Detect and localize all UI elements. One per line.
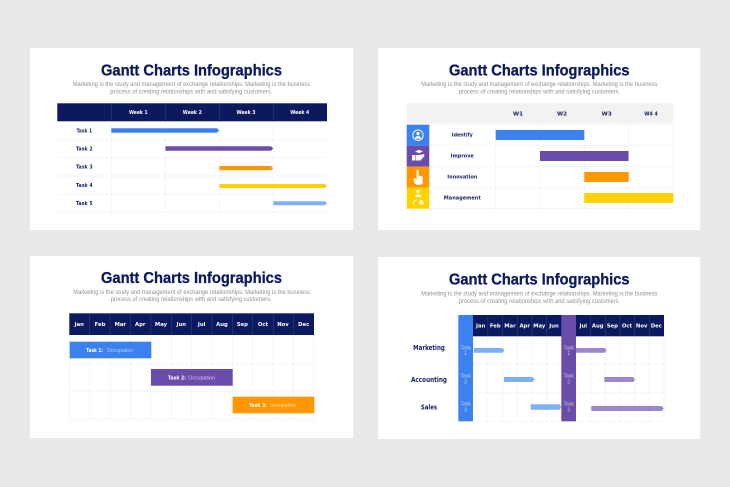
- phase labels: Management: [444, 196, 481, 202]
- bar: management: [584, 193, 673, 203]
- description text: process of creating relationships with and satisfying customers.: [111, 296, 272, 303]
- table header: Week 4: [290, 110, 309, 116]
- month header: Nov: [277, 322, 289, 328]
- gantt chart: months: [69, 313, 314, 419]
- department labels: [411, 344, 447, 412]
- month header: Jul: [197, 322, 206, 328]
- icon: hand with box: [407, 146, 429, 167]
- description text: [421, 290, 657, 305]
- month header: Oct: [622, 323, 633, 329]
- month header: Apr: [135, 322, 146, 328]
- task labels: [76, 128, 93, 207]
- task labels: Task 2: [76, 146, 93, 152]
- bar: accounting first half: [504, 377, 535, 382]
- department labels: Accounting: [411, 376, 447, 384]
- panel: monthly occupation gantt: [30, 256, 353, 438]
- column: first half tasks: Task: [461, 345, 471, 351]
- month header: Feb: [490, 323, 501, 329]
- month header: Jan: [475, 323, 486, 329]
- bar: task 2: [166, 146, 273, 151]
- table header: Week 1: [129, 110, 148, 116]
- description text: [421, 81, 657, 96]
- month header: Apr: [519, 323, 530, 329]
- title: Gantt Charts Infographics: [101, 270, 282, 287]
- column: first half tasks: 1: [464, 351, 467, 357]
- month header: Dec: [651, 323, 662, 329]
- gantt chart: phases: [407, 103, 673, 209]
- bar: task 2: Occupation: [188, 375, 215, 381]
- month header: Sep: [237, 322, 248, 328]
- month header: Oct: [258, 322, 269, 328]
- bar: task 1: Occupation: [107, 348, 133, 354]
- month header: Dec: [298, 322, 309, 328]
- bar: innovation: [584, 172, 629, 182]
- column: second half tasks: 1: [567, 351, 570, 357]
- title: Gantt Charts Infographics: [101, 62, 282, 79]
- month header: May: [533, 323, 546, 329]
- description text: Marketing is the study and management of exchange relationships. Marketing is the business: [73, 81, 310, 88]
- phase labels: Innovation: [447, 175, 477, 181]
- task labels: Task 4: [76, 183, 93, 189]
- bar: task 4: [220, 184, 327, 188]
- panel: weekly task gantt: [30, 48, 353, 230]
- month header: Jun: [548, 323, 559, 329]
- month header: Jan: [74, 322, 84, 328]
- table header: W1: [513, 111, 523, 117]
- bar: accounting second half: [604, 377, 635, 382]
- bar: task 5: [273, 201, 327, 205]
- month header: [69, 313, 314, 335]
- department labels: Marketing: [413, 344, 445, 352]
- column: second half tasks: Task: [564, 345, 574, 351]
- bar: task 1: [70, 342, 151, 358]
- bar: marketing first half: [474, 348, 504, 353]
- description text: process of creating relationships with and satisfying customers.: [459, 298, 620, 305]
- panel: department gantt: [378, 257, 700, 439]
- table header: [407, 103, 673, 123]
- table header: W2: [557, 111, 567, 117]
- description text: process of creating relationships with and satisfying customers.: [110, 89, 273, 96]
- month header: Jun: [176, 322, 186, 328]
- month header: Aug: [592, 323, 604, 329]
- month header: [473, 315, 664, 336]
- bar: sales first half: [531, 404, 561, 410]
- task labels: Task 3: [76, 165, 93, 171]
- month header: Jul: [579, 323, 587, 329]
- table header: [57, 103, 327, 121]
- bar: task 3: Task 3:: [249, 403, 267, 409]
- description text: process of creating relationships with and satisfying customers.: [459, 89, 620, 96]
- bar: task 1: [111, 128, 219, 133]
- phase labels: Improve: [451, 154, 474, 160]
- description text: [73, 81, 310, 96]
- description text: Marketing is the study and management of exchange relationships. Marketing is the business: [421, 290, 657, 297]
- gantt chart: departments: [411, 315, 664, 421]
- month header: Feb: [95, 322, 106, 328]
- bar: sales second half: [591, 406, 664, 411]
- bar: task 2: [151, 369, 233, 386]
- title: Gantt Charts Infographics: [449, 271, 630, 288]
- icon: person with nodes: [407, 188, 429, 209]
- description text: Marketing is the study and management of exchange relationships. Marketing is the business: [421, 81, 657, 88]
- bar: task 3: [220, 166, 273, 170]
- column: first half tasks: [458, 315, 473, 421]
- column: first half tasks: Task: [461, 374, 471, 380]
- description text: Marketing is the study and management of exchange relationships. Marketing is the business: [73, 289, 310, 296]
- bar: marketing second half: [576, 348, 607, 353]
- task labels: Task 1: [76, 128, 92, 134]
- bar: identify: [496, 130, 584, 140]
- table header: W3: [602, 111, 612, 117]
- description text: [73, 289, 310, 303]
- month header: Aug: [216, 322, 228, 328]
- column: second half tasks: [561, 315, 576, 421]
- department labels: Sales: [421, 404, 437, 412]
- icon: pointing hand: [407, 167, 429, 188]
- bar: improve: [540, 151, 628, 161]
- column: second half tasks: Task: [564, 402, 574, 408]
- column: second half tasks: Task: [564, 374, 574, 380]
- column: second half tasks: 2: [567, 380, 570, 386]
- table header: Week 3: [236, 110, 256, 116]
- phase labels: [444, 132, 481, 202]
- month header: Nov: [636, 323, 648, 329]
- month header: May: [155, 322, 168, 328]
- column: second half tasks: 3: [567, 408, 570, 414]
- month header: Sep: [607, 323, 618, 329]
- panel: four phase gantt: [378, 48, 700, 230]
- title: Gantt Charts Infographics: [449, 62, 630, 79]
- month header: Mar: [504, 323, 516, 329]
- bar: task 1: Task 1:: [86, 348, 103, 354]
- table header: W4 4: [644, 111, 658, 117]
- column: first half tasks: 2: [464, 380, 467, 386]
- table header: Week 2: [183, 110, 202, 116]
- bar: task 3: [233, 397, 314, 413]
- month header: Mar: [115, 322, 126, 328]
- column: first half tasks: Task: [461, 402, 471, 408]
- task labels: Task 5: [76, 201, 93, 207]
- icon: person in circle: [407, 125, 429, 146]
- phase labels: Identify: [452, 132, 473, 138]
- column: first half tasks: 3: [464, 408, 467, 414]
- gantt chart: weeks: [57, 103, 327, 213]
- bar: task 3: Occupation: [270, 403, 296, 409]
- bar: task 2: Task 2:: [168, 375, 186, 381]
